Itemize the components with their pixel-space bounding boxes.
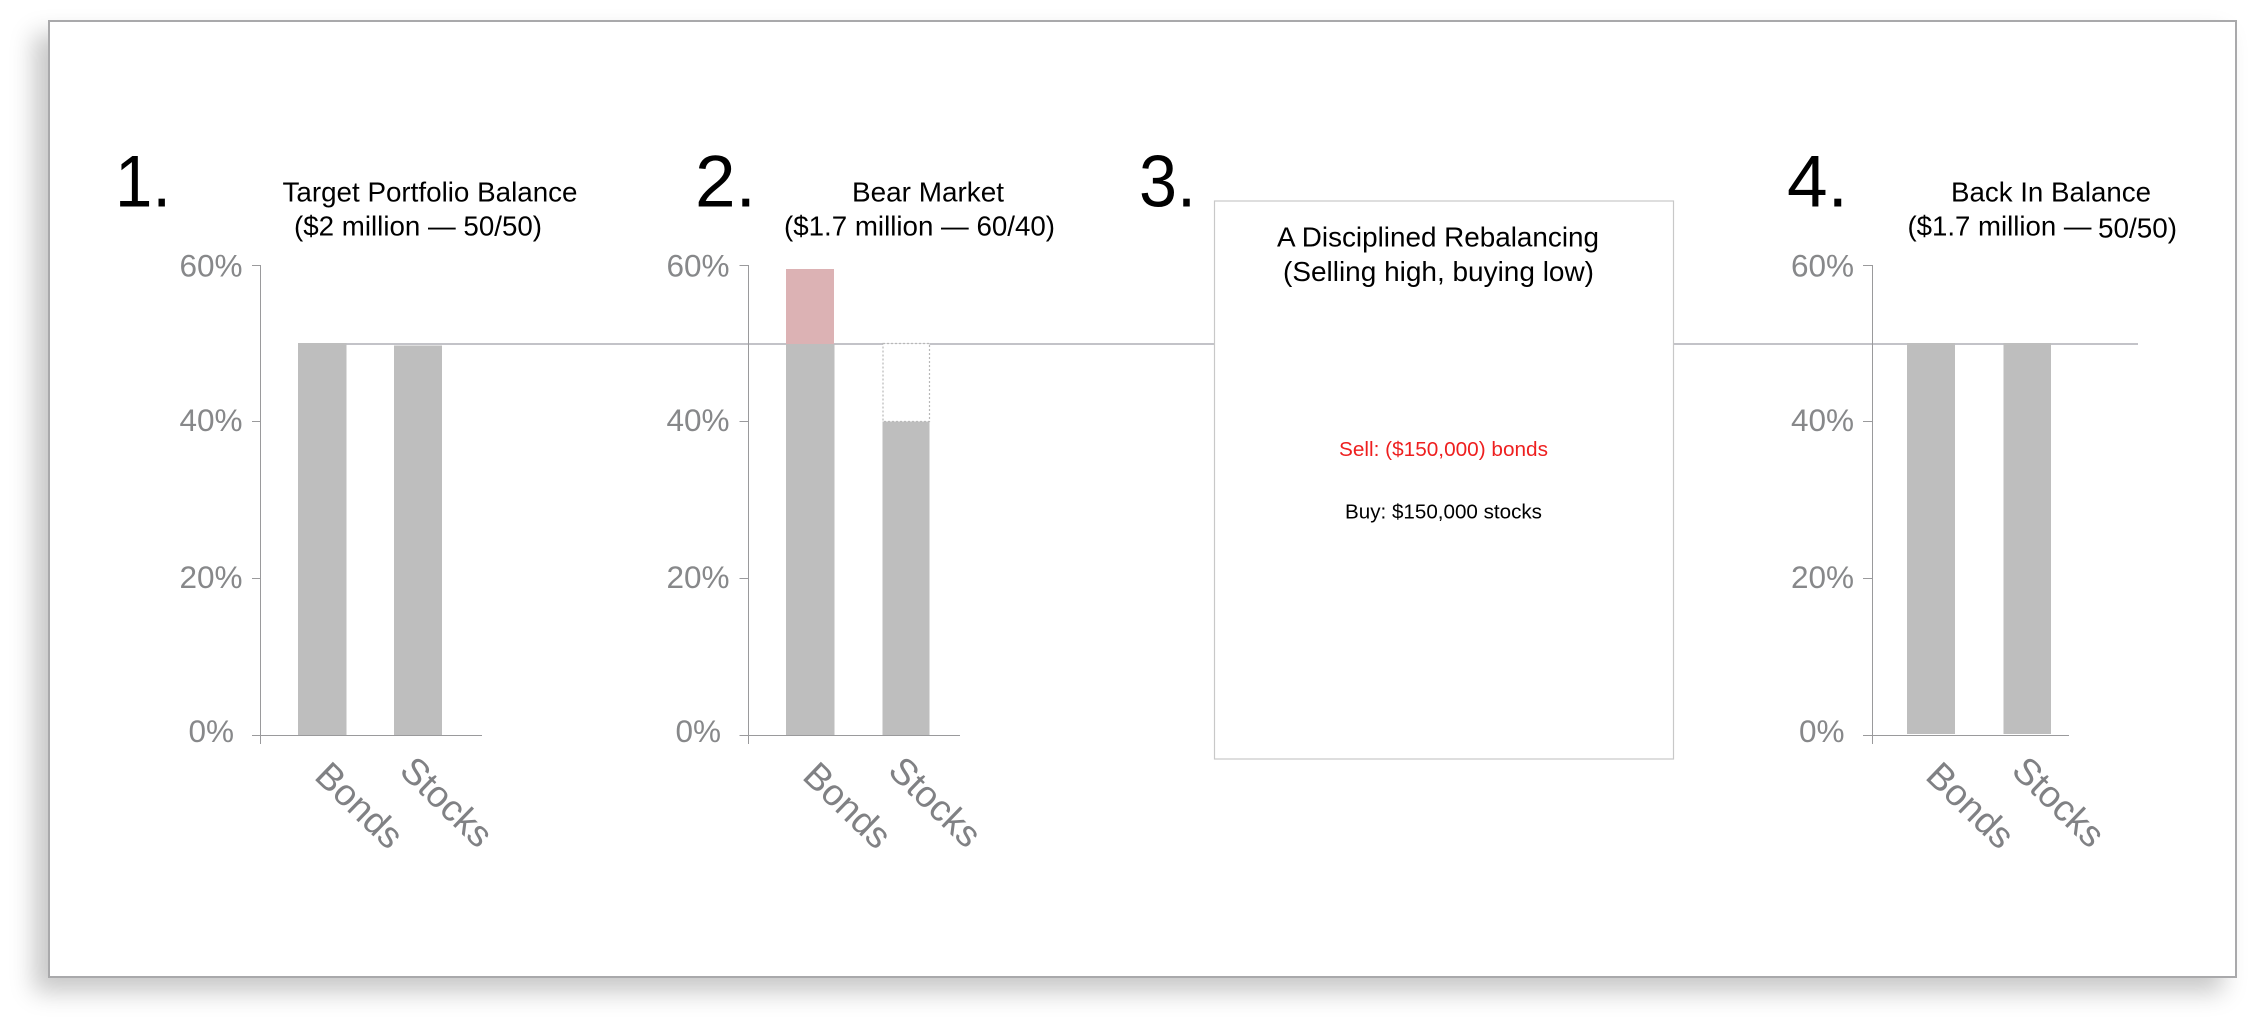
50 percent reference line (298, 343, 2138, 345)
box heading: A Disciplined Rebalancing (1277, 222, 1599, 252)
y axis labels 2 (666, 248, 730, 749)
category labels 2: Bonds (795, 754, 899, 857)
category labels 4: Stocks (2004, 749, 2113, 855)
sell instruction: Sell: ($150,000) bonds (1339, 438, 1548, 461)
y axis labels 4: 40% (1791, 402, 1854, 438)
dotted missing stock allocation (883, 344, 930, 422)
y axis labels 1 (179, 248, 242, 749)
y axis labels 1: 20% (179, 559, 242, 595)
y axis labels 2: 40% (666, 402, 730, 438)
axes 4 (1863, 265, 2069, 744)
y axis labels 1: 60% (179, 248, 242, 284)
y axis labels 4: 0% (1799, 713, 1844, 749)
panel 2: bear market (666, 142, 1055, 857)
category labels 2: Stocks (881, 749, 989, 855)
y axis labels 2: 60% (666, 248, 730, 284)
step number 2: 2. (695, 142, 756, 222)
panel 1: target portfolio balance (115, 142, 578, 857)
title 1 (282, 176, 578, 242)
y axis labels 1: 40% (179, 402, 242, 438)
title 4: 50/50) (2098, 212, 2177, 244)
y axis labels 2: 0% (675, 713, 721, 749)
category labels 1 (307, 749, 501, 857)
title 4: Back In Balance (1951, 176, 2151, 208)
y axis labels 4: 60% (1791, 248, 1854, 284)
step number 1: 1. (115, 142, 171, 222)
title 1: Target Portfolio Balance (282, 176, 578, 208)
excess bond allocation bar (786, 269, 834, 344)
title 4 (1908, 176, 2177, 244)
bars 2 (786, 344, 930, 735)
bars 1 (298, 343, 442, 735)
rebalancing box (1214, 201, 1674, 759)
step number 3: 3. (1139, 142, 1196, 222)
panel 3: disciplined rebalancing (1139, 142, 1674, 759)
step number 4: 4. (1787, 142, 1848, 222)
category labels 1: Bonds (307, 754, 411, 857)
category labels 1: Stocks (392, 749, 501, 855)
title 2: Bear Market (852, 176, 1004, 208)
category labels 4: Bonds (1918, 754, 2022, 857)
box heading: (Selling high, buying low) (1283, 256, 1594, 287)
buy instruction: Buy: $150,000 stocks (1345, 500, 1542, 524)
panel 4: back in balance (1787, 142, 2177, 857)
y axis labels 4 (1791, 248, 1854, 749)
category labels 4 (1918, 749, 2113, 857)
box heading (1277, 222, 1599, 287)
y axis labels 4: 20% (1791, 559, 1854, 595)
bars 4 (1907, 343, 2051, 734)
title 2: ($1.7 million — 60/40) (784, 210, 1055, 242)
y axis labels 1: 0% (188, 713, 234, 749)
title 2 (784, 176, 1055, 242)
axes 2 (740, 265, 960, 744)
category labels 2 (795, 749, 989, 857)
y axis labels 2: 20% (666, 559, 730, 595)
title 1: ($2 million — 50/50) (294, 210, 542, 242)
title 4: ($1.7 million — (1908, 210, 2092, 242)
axes 1 (252, 265, 482, 744)
